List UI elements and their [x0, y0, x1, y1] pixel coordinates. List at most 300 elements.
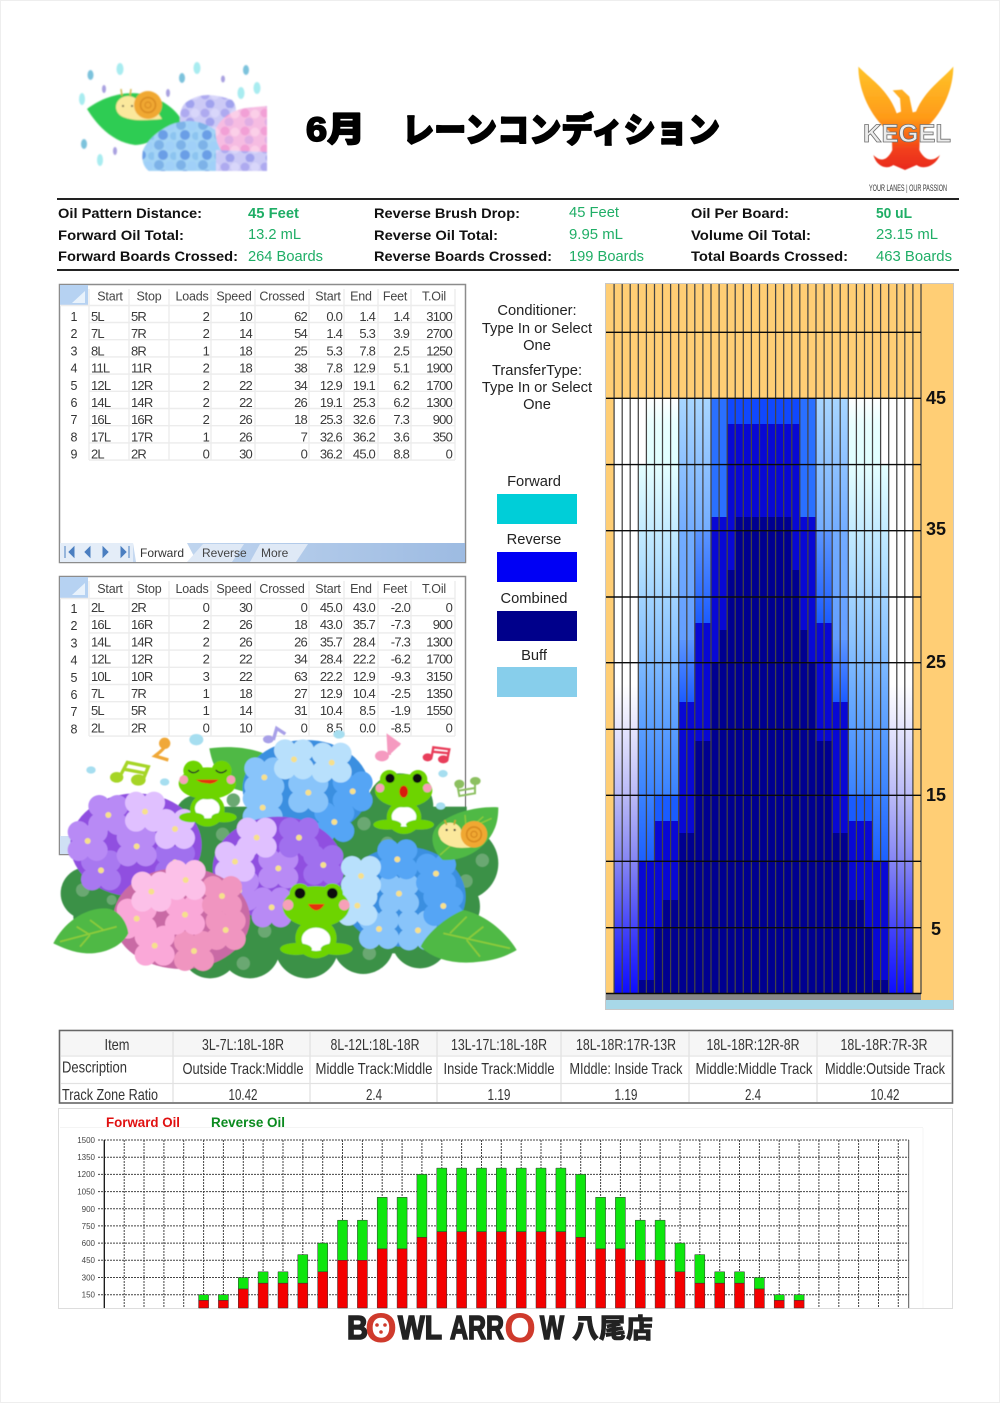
description row: Outside Track:Middle: [182, 1061, 304, 1078]
legend text: conditioner and transfer: [482, 303, 592, 413]
table rows: 5.3: [359, 326, 376, 341]
chart legend: Reverse Oil: [211, 1114, 285, 1130]
table rows: 2: [203, 652, 210, 667]
table rows: 28.4: [320, 652, 343, 667]
stats column 1: 45 Feet: [248, 206, 299, 222]
table rows: 2: [203, 412, 210, 427]
table header: [97, 582, 446, 596]
table rows: 5R: [131, 703, 146, 718]
table rows: 1700: [426, 652, 453, 667]
table header: T.Oil: [422, 290, 446, 304]
table rows: 28.4: [353, 634, 376, 649]
stats column 3: 463 Boards: [876, 249, 952, 265]
table rows: 17L: [91, 429, 111, 444]
table header: End: [350, 582, 372, 596]
legend text: conditioner and transfer: One: [523, 397, 551, 413]
table rows: 2: [203, 309, 210, 324]
frog: front: [280, 883, 353, 958]
table rows: 12L: [91, 378, 111, 393]
y axis labels: 1200: [77, 1170, 96, 1179]
table header: Start: [97, 582, 123, 596]
table rows: 2700: [426, 326, 453, 341]
table rows: 43.0: [353, 600, 376, 615]
illustration: snail on leaf with hydrangea and rain: [79, 62, 267, 172]
legend text: conditioner and transfer: One: [523, 338, 551, 354]
table rows: 7: [301, 429, 308, 444]
green reverse bars: [199, 1168, 804, 1300]
stats column 3: Oil Per Board:: [691, 205, 789, 221]
table rows: 62: [294, 309, 308, 324]
stats column 1: Forward Oil Total:: [58, 227, 184, 243]
table rows: 10.4: [353, 686, 376, 701]
table rows: 1: [71, 602, 78, 616]
y axis labels: 600: [82, 1239, 96, 1248]
table rows: 14R: [131, 395, 153, 410]
table rows: 26: [294, 634, 308, 649]
stats column 2: [374, 205, 644, 265]
distance labels: 5: [931, 919, 941, 939]
y axis labels: 900: [82, 1205, 96, 1214]
y axis labels: 1050: [77, 1188, 96, 1196]
stats panel: [57, 198, 959, 271]
header row: 3L-7L:18L-18R: [202, 1037, 284, 1054]
table rows: 36.2: [353, 429, 376, 444]
table rows: 2: [203, 634, 210, 649]
sheet tabs: Forward: [140, 546, 184, 560]
table rows: 6: [71, 688, 78, 702]
table rows: 8.5: [359, 703, 376, 718]
legend: oil colours: Combined: [501, 591, 567, 607]
table rows: 0.0: [326, 309, 343, 324]
table rows: 18: [239, 343, 253, 358]
table rows: 19.1: [320, 395, 343, 410]
table rows: 7: [71, 705, 78, 719]
table rows: 22.2: [320, 669, 343, 684]
table rows: 11L: [91, 361, 110, 376]
hydrangea: purple centre: [213, 817, 344, 927]
table rows: 17R: [131, 429, 153, 444]
table header: Feet: [383, 582, 408, 596]
table rows: 1.4: [326, 326, 343, 341]
table rows: 2L: [91, 720, 104, 735]
table rows: 12.9: [320, 378, 343, 393]
table rows: 31: [294, 703, 308, 718]
table rows: 5L: [91, 309, 104, 324]
table rows: [71, 600, 453, 736]
table rows: 8.5: [326, 720, 343, 735]
table rows: 2: [203, 361, 210, 376]
dots: [86, 730, 448, 810]
table rows: 12.9: [320, 686, 343, 701]
table rows: 0: [446, 720, 453, 735]
stats column 3: 23.15 mL: [876, 227, 938, 243]
stats column 3: Volume Oil Total:: [691, 227, 811, 243]
table rows: 26: [239, 412, 253, 427]
stats column 2: Reverse Oil Total:: [374, 227, 498, 243]
table rows: 11R: [131, 361, 152, 376]
table header: Stop: [137, 290, 162, 304]
table rows: 2R: [131, 447, 146, 462]
table rows: 3: [203, 669, 210, 684]
table rows: -2.0: [391, 600, 411, 615]
table header: T.Oil: [422, 582, 446, 596]
table rows: 9: [71, 448, 78, 462]
phoenix: [858, 67, 953, 170]
table rows: 32.6: [353, 412, 376, 427]
table rows: 18: [239, 686, 253, 701]
table rows: 43.0: [320, 617, 343, 632]
description row: Middle:Middle Track: [696, 1061, 813, 1078]
distance labels: 45: [926, 388, 946, 408]
description row: [62, 1060, 946, 1078]
table rows: 1.4: [393, 309, 410, 324]
y axis labels: 450: [82, 1256, 96, 1265]
table rows: 0: [301, 720, 308, 735]
y axis labels: 150: [82, 1290, 96, 1300]
legend: oil colours: Reverse: [507, 532, 561, 548]
table rows: 26: [294, 395, 308, 410]
table rows: 2: [203, 395, 210, 410]
table rows: 1350: [426, 686, 453, 701]
table rows: 22: [239, 652, 253, 667]
table rows: 7R: [131, 326, 146, 341]
music notes: [110, 728, 481, 796]
chart legend: Forward Oil: [106, 1114, 180, 1130]
table rows: 36.2: [320, 447, 343, 462]
table header: Start: [97, 290, 123, 304]
ratio row: 10.42: [228, 1087, 258, 1104]
table header: [97, 290, 446, 304]
table header: Feet: [383, 290, 408, 304]
table rows: 1.4: [359, 309, 376, 324]
table rows: 3: [71, 344, 78, 358]
leaf behind blue flowers: [209, 747, 263, 793]
table rows: 14R: [131, 634, 153, 649]
stats column 2: 9.95 mL: [569, 227, 623, 243]
stats column 1: Forward Boards Crossed:: [58, 248, 238, 264]
table rows: 5.1: [393, 361, 410, 376]
table rows: 22: [239, 378, 253, 393]
description row: Description: [62, 1060, 127, 1076]
table rows: 1: [203, 343, 210, 358]
table rows: 6.2: [393, 395, 410, 410]
table rows: 45.0: [353, 447, 376, 462]
header row: 8L-12L:18L-18R: [330, 1037, 420, 1054]
table rows: 5: [71, 671, 78, 685]
table rows: 22: [239, 395, 253, 410]
stats column 2: Reverse Boards Crossed:: [374, 248, 552, 264]
table rows: 0: [301, 447, 308, 462]
footer brand: Bowl Arrow: ARR: [450, 1309, 504, 1346]
panel: reverse load table: [60, 576, 466, 854]
table rows: 6: [71, 396, 78, 410]
description row: Middle:Outside Track: [825, 1061, 946, 1078]
footer brand: Bowl Arrow: O: [365, 1304, 397, 1351]
red forward bars: [199, 1232, 804, 1308]
table rows: 0.0: [359, 720, 376, 735]
table rows: 30: [239, 600, 253, 615]
table rows: 12L: [91, 652, 111, 667]
table rows: 1: [203, 703, 210, 718]
table header: End: [350, 290, 372, 304]
ratio row: 10.42: [870, 1087, 900, 1104]
ratio row: 1.19: [488, 1087, 511, 1104]
table rows: 16L: [91, 412, 111, 427]
table rows: 5L: [91, 703, 104, 718]
legend: oil colours: Forward: [507, 474, 561, 490]
table rows: -8.5: [391, 720, 411, 735]
table rows: 1300: [426, 395, 453, 410]
table rows: 54: [294, 326, 308, 341]
table header: Crossed: [259, 290, 305, 304]
hydrangea: blue top: [243, 739, 373, 842]
distance labels: [926, 388, 946, 939]
table rows: 12.9: [353, 361, 376, 376]
table header: Loads: [175, 290, 209, 304]
footer brand: Bowl Arrow: O: [504, 1304, 536, 1351]
stats column 1: Oil Pattern Distance:: [58, 205, 202, 221]
stats column 3: Total Boards Crossed:: [691, 248, 848, 264]
table header: Start: [315, 582, 341, 596]
ratio row: 1.19: [614, 1087, 638, 1104]
stats column 1: 13.2 mL: [248, 227, 301, 243]
table rows: 12.9: [353, 669, 376, 684]
legend text: conditioner and transfer: Type In or Select: [482, 380, 592, 396]
table rows: 14L: [91, 395, 111, 410]
table header: Start: [315, 290, 341, 304]
footer brand: Bowl Arrow: 八尾店: [572, 1307, 653, 1346]
table rows: 26: [239, 429, 253, 444]
legend: oil colours: Buff: [521, 648, 548, 664]
table rows: 2L: [91, 600, 104, 615]
table rows: 0: [446, 447, 453, 462]
footer brand: Bowl Arrow: [347, 1304, 653, 1351]
table rows: 45.0: [320, 600, 343, 615]
y axis labels: [77, 1136, 96, 1300]
table rows: 30: [239, 447, 253, 462]
table rows: 14L: [91, 634, 111, 649]
table rows: 3100: [426, 309, 453, 324]
table rows: 1: [203, 429, 210, 444]
chart legend: [106, 1114, 285, 1130]
table rows: 26: [239, 634, 253, 649]
leaves bottom: [53, 908, 517, 963]
snail on leaf: [432, 807, 498, 860]
table rows: 900: [433, 617, 453, 632]
table rows: 35.7: [320, 634, 343, 649]
table rows: 4: [71, 362, 78, 376]
snail: [116, 89, 162, 120]
table rows: 16L: [91, 617, 111, 632]
table header: Speed: [216, 582, 252, 596]
chart: oil per board stacked bars: [58, 1108, 952, 1308]
hydrangea: [142, 95, 267, 172]
leaf: [87, 93, 182, 145]
table rows: 7R: [131, 686, 146, 701]
header row: Item: [104, 1037, 130, 1054]
table rows: 7.3: [393, 412, 410, 427]
table rows: 35.7: [353, 617, 376, 632]
distance labels: 25: [926, 652, 946, 672]
table rows: 3.6: [393, 429, 410, 444]
panel: forward load table: [60, 284, 466, 562]
table rows: 1: [203, 686, 210, 701]
table header: Loads: [175, 582, 209, 596]
y axis labels: 1350: [77, 1153, 96, 1162]
stats column 1: 264 Boards: [248, 249, 323, 265]
table rows: 8R: [131, 343, 146, 358]
table rows: 0: [203, 447, 210, 462]
table rows: 4: [71, 654, 78, 668]
table rows: -2.5: [391, 686, 411, 701]
logo tagline: YOUR LANES | OUR PASSION: [869, 183, 947, 193]
table rows: 1250: [426, 343, 453, 358]
table rows: 34: [294, 378, 308, 393]
title: 6月: [306, 111, 365, 149]
bush: [61, 773, 498, 978]
table rows: -9.3: [391, 669, 411, 684]
table rows: 2: [203, 326, 210, 341]
header row: [104, 1037, 928, 1054]
table rows: 8.8: [393, 447, 410, 462]
table rows: 0: [446, 600, 453, 615]
table rows: 25: [294, 343, 308, 358]
table rows: 8: [71, 722, 78, 736]
table rows: [71, 309, 453, 462]
table rows: 2: [71, 619, 78, 633]
table rows: 0: [301, 600, 308, 615]
table rows: 14: [239, 703, 253, 718]
table rows: 5: [71, 379, 78, 393]
legend text: conditioner and transfer: TransferType:: [492, 363, 582, 379]
table rows: 10: [239, 309, 253, 324]
table rows: 2.5: [393, 343, 410, 358]
frog: singing: [373, 770, 434, 834]
table rows: 12R: [131, 378, 153, 393]
logo wordmark: KEGEL: [863, 120, 951, 148]
table rows: 2R: [131, 600, 146, 615]
stats column 2: 199 Boards: [569, 249, 644, 265]
illustration: frogs and hydrangeas: [53, 728, 517, 978]
table rows: 6.2: [393, 378, 410, 393]
table rows: 22: [239, 669, 253, 684]
legend text: conditioner and transfer: Conditioner:: [497, 303, 577, 319]
legend text: conditioner and transfer: Type In or Select: [482, 321, 592, 337]
table rows: 7L: [91, 326, 104, 341]
table rows: 27: [294, 686, 308, 701]
header row: 18L-18R:7R-3R: [840, 1037, 928, 1054]
table rows: 22.2: [353, 652, 376, 667]
oil shading layers: [614, 398, 913, 994]
stats column 2: 45 Feet: [569, 205, 619, 221]
table rows: 3150: [426, 669, 453, 684]
header row: 18L-18R:17R-13R: [576, 1037, 676, 1054]
bush spots: [76, 793, 489, 970]
stats column 1: [58, 205, 323, 265]
table rows: 350: [433, 429, 453, 444]
description row: Inside Track:Middle: [444, 1061, 555, 1078]
table rows: 25.3: [353, 395, 376, 410]
stats column 3: [691, 205, 952, 265]
table rows: 16R: [131, 617, 153, 632]
table header: Crossed: [259, 582, 305, 596]
header row: 18L-18R:12R-8R: [706, 1037, 800, 1054]
sheet tabs: More: [261, 546, 289, 560]
table rows: -7.3: [391, 634, 411, 649]
y axis labels: 1500: [77, 1136, 96, 1145]
table rows: 5.3: [326, 343, 343, 358]
footer brand: Bowl Arrow: B: [347, 1309, 368, 1346]
ratio row: [62, 1087, 900, 1104]
y axis labels: 300: [82, 1274, 96, 1282]
table rows: 7.8: [326, 361, 343, 376]
sheet tabs: [60, 543, 465, 562]
ratio row: 2.4: [366, 1087, 382, 1104]
footer brand: Bowl Arrow: W: [540, 1309, 565, 1346]
table rows: 2: [203, 617, 210, 632]
sheet tabs: Reverse: [202, 546, 247, 560]
footer brand: Bowl Arrow: WL: [398, 1309, 442, 1346]
table rows: 19.1: [353, 378, 376, 393]
table rows: 10L: [91, 669, 111, 684]
description row: Middle Track:Middle: [316, 1061, 433, 1078]
table rows: 10R: [131, 669, 153, 684]
table rows: 5R: [131, 309, 146, 324]
table rows: 2R: [131, 720, 146, 735]
hydrangea: pink: [113, 860, 250, 971]
table: track zone ratio: [60, 1030, 952, 1104]
table rows: 7.8: [359, 343, 376, 358]
table rows: 18: [294, 617, 308, 632]
table header: Stop: [137, 582, 162, 596]
table rows: 7L: [91, 686, 104, 701]
distance labels: 35: [926, 519, 946, 539]
table rows: 25.3: [320, 412, 343, 427]
table header: Speed: [216, 290, 252, 304]
table rows: 18: [294, 412, 308, 427]
table rows: 16R: [131, 412, 153, 427]
table rows: 8L: [91, 343, 104, 358]
table rows: 1: [71, 310, 78, 324]
stats column 2: Reverse Brush Drop:: [374, 205, 520, 221]
table rows: 18: [239, 361, 253, 376]
table rows: -1.9: [391, 703, 411, 718]
table rows: 32.6: [320, 429, 343, 444]
legend: oil colours: [497, 474, 577, 697]
chart: oil pattern heat map: [606, 284, 954, 1010]
description row: MIddle: Inside Track: [570, 1061, 683, 1078]
stats column 3: 50 uL: [876, 206, 912, 222]
table rows: 1300: [426, 634, 453, 649]
ratio row: Track Zone Ratio: [62, 1087, 158, 1104]
distance labels: 15: [926, 785, 946, 805]
raindrops: [79, 62, 260, 166]
table rows: 2L: [91, 447, 104, 462]
table rows: 14: [239, 326, 253, 341]
table rows: 0: [203, 600, 210, 615]
table rows: 0: [203, 720, 210, 735]
ratio row: 2.4: [745, 1087, 761, 1104]
table rows: 900: [433, 412, 453, 427]
y axis labels: 750: [82, 1222, 96, 1231]
table rows: 1550: [426, 703, 453, 718]
table rows: -6.2: [391, 652, 411, 667]
table rows: 38: [294, 361, 308, 376]
table rows: 3.9: [393, 326, 410, 341]
table rows: 12R: [131, 652, 153, 667]
hydrangea: blue right: [337, 839, 466, 950]
table rows: -7.3: [391, 617, 411, 632]
